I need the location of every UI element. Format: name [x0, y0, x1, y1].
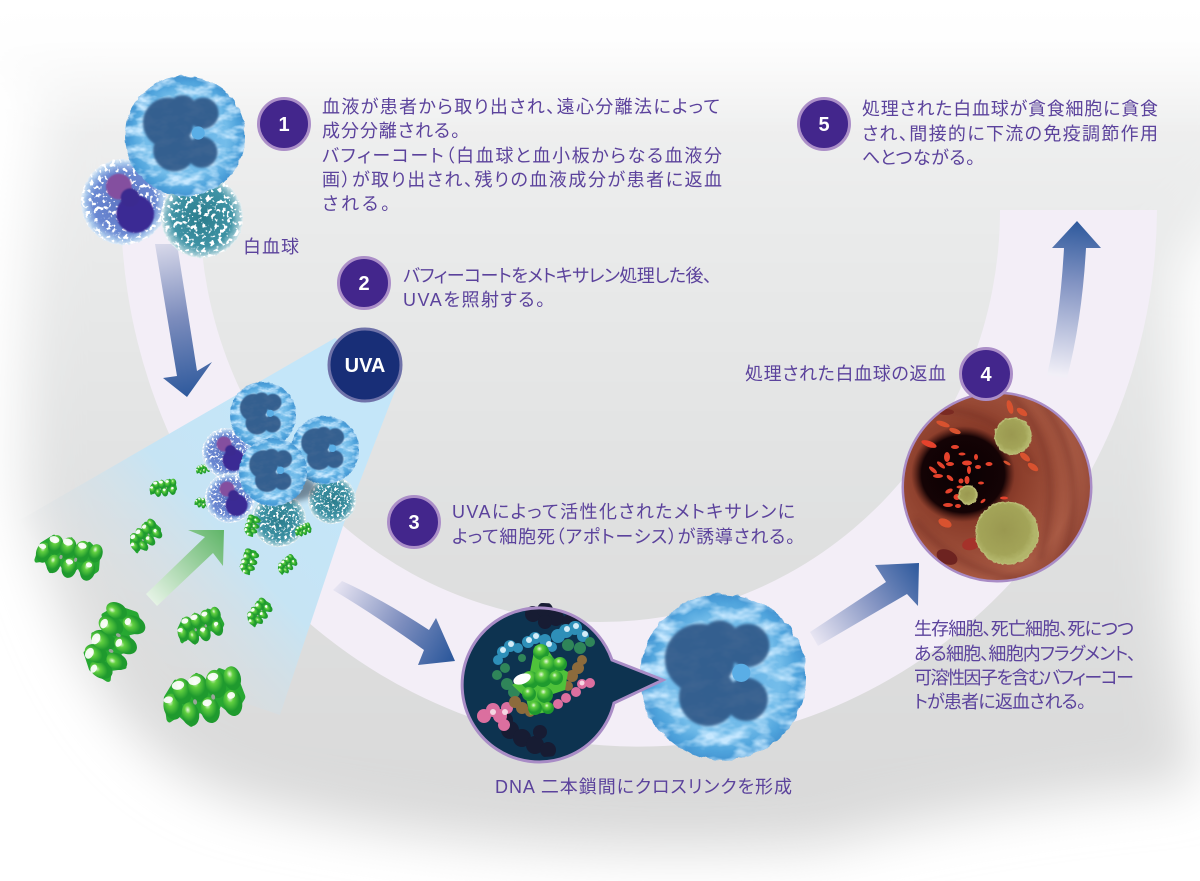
- step 2 text: バフィーコートをメトキサレン処理した後、: [403, 266, 712, 286]
- step 3 text: [452, 502, 795, 547]
- callout outline: [462, 608, 663, 762]
- UVA badge: UVA: [345, 355, 385, 377]
- step 3 text: よって細胞死（アポトーシス）が誘導される。: [452, 527, 795, 547]
- step 4 description: [914, 619, 1136, 712]
- step 2 badge: 2: [358, 273, 370, 295]
- bound molecule green: [512, 646, 568, 715]
- step 4 text: 処理された白血球の返血: [745, 364, 946, 384]
- step 1 text: 画）が取り出され、残りの血液成分が患者に返血: [322, 170, 722, 190]
- cell: teal granulocyte: [161, 176, 243, 258]
- step 1 text: 血液が患者から取り出され、遠心分離法によって: [322, 97, 720, 117]
- arrow: white blood cells to cone: [155, 244, 212, 397]
- step 1 text: される。: [322, 194, 390, 214]
- DNA strand blue: [493, 621, 589, 665]
- step 4 description: トが患者に返血される。: [914, 692, 1086, 712]
- step 3 badge: [388, 496, 440, 548]
- step 2 badge: [338, 258, 390, 308]
- step 1 badge: 1: [278, 114, 290, 136]
- step 4 badge: [960, 348, 1012, 400]
- cell cluster in UVA cone: [202, 382, 359, 547]
- neutrophil with crosslinks: [640, 594, 806, 760]
- step 5 text: され、間接的に下流の免疫調節作用: [862, 124, 1158, 144]
- step 4 description: 可溶性因子を含むバフィーコー: [914, 668, 1134, 688]
- pale U-shaped band: [118, 210, 1157, 747]
- UVA light cone: [20, 338, 398, 715]
- UVA badge: [329, 329, 401, 401]
- step 2 text: UVAを照射する。: [403, 290, 545, 310]
- DNA crosslink caption: DNA 二本鎖間にクロスリンクを形成: [495, 777, 792, 797]
- step 1 text: 成分分離される。: [322, 121, 460, 141]
- DNA close-up callout: [462, 602, 663, 762]
- group: white blood cells: [81, 76, 299, 258]
- blood vessel close-up: [900, 390, 1100, 590]
- step 4 badge: 4: [980, 364, 992, 386]
- step 1 badge: [258, 98, 310, 150]
- step 5 text: [862, 99, 1158, 168]
- treated white blood cells: [959, 418, 1038, 564]
- step 5 badge: 5: [818, 114, 830, 136]
- arrow: DNA to vessel: [810, 563, 919, 646]
- red blood cells: [920, 438, 1008, 508]
- DNA strand pink: [477, 678, 595, 731]
- DNA helix dark strand: [497, 602, 578, 758]
- step 4 description: 生存細胞、死亡細胞、死につつ: [914, 619, 1134, 639]
- cell: purple granulocyte: [81, 159, 167, 245]
- step 3 badge: 3: [408, 512, 420, 534]
- step 5 text: 処理された白血球が貪食細胞に貪食: [862, 99, 1158, 119]
- arrow: cone to DNA: [333, 581, 455, 665]
- cell: blue neutrophil: [125, 76, 245, 196]
- green arrow: [146, 530, 224, 606]
- step 3 text: UVAによって活性化されたメトキサレンに: [452, 502, 795, 522]
- step 2 text: [403, 266, 712, 310]
- methoxsalen molecules: [32, 463, 300, 732]
- label: white blood cells: 白血球: [243, 237, 299, 257]
- step 5 text: へとつながる。: [862, 148, 975, 168]
- step 4 description: ある細胞、細胞内フラグメント、: [914, 644, 1136, 664]
- step 5 badge: [798, 98, 850, 150]
- arrow: vessel to step 5: [1047, 221, 1101, 378]
- step 1 text: [322, 97, 722, 214]
- step 1 text: バフィーコート（白血球と血小板からなる血液分: [322, 146, 722, 166]
